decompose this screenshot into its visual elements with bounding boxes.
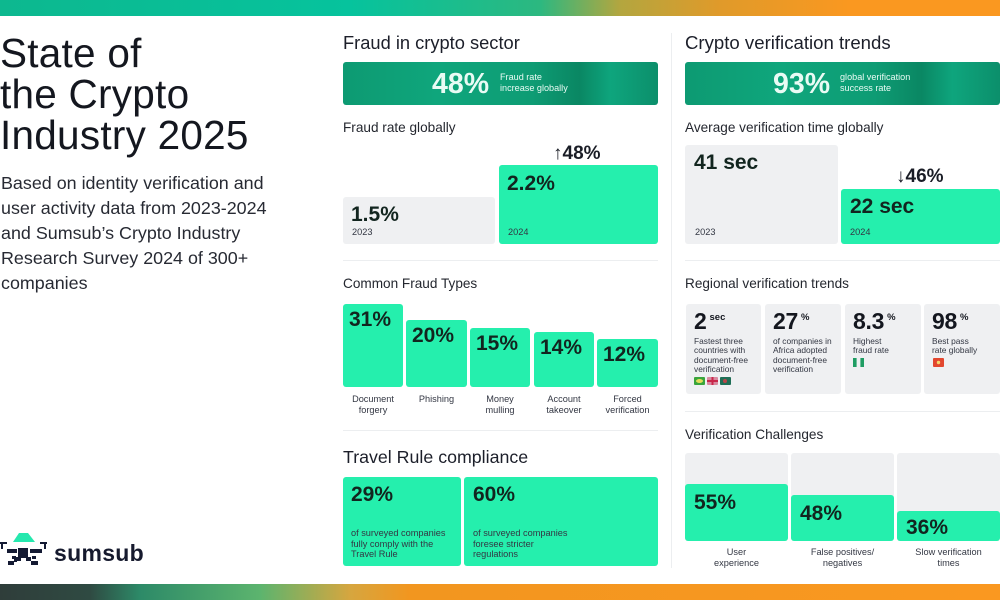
bar: money mulling: 15% [476, 332, 518, 355]
banner caption [840, 72, 910, 93]
card: 29% comply [343, 477, 461, 566]
bar: forced verification: 12% [603, 343, 645, 366]
card: 27%: verification [773, 364, 813, 374]
card: 2 sec: document-free [694, 355, 748, 365]
card: 98%: 98 % [932, 308, 968, 334]
icon: flag nigeria [853, 358, 864, 367]
bar chart: fraud types [343, 304, 658, 415]
bar: 36%: 36% [906, 516, 948, 539]
card: 2 sec: countries with [694, 345, 745, 355]
label: money mulling: mulling [485, 404, 515, 414]
icon: sumsub mascot [0, 533, 47, 565]
intro text: Based on identity verification and [1, 173, 264, 193]
heading: travel rule compliance: Travel Rule compliance [343, 447, 528, 467]
intro text: companies [1, 273, 88, 293]
card: 98%: Best pass [932, 336, 969, 346]
banner caption: success rate [840, 83, 891, 93]
bar: 22 sec: 2024 [850, 227, 870, 237]
bar: 2023 fraud rate [343, 197, 495, 244]
track [791, 453, 894, 541]
card: 8.3%: fraud rate [853, 345, 889, 355]
bar: document forgery: 31% [349, 308, 391, 331]
card: 29% comply: of surveyed companies [351, 528, 445, 538]
chart: user experience [685, 453, 788, 568]
label: money mulling: Money [486, 394, 514, 404]
heading: fraud rate globally: Fraud rate globally [343, 120, 456, 135]
bar: 41 sec: 2023 [695, 227, 715, 237]
title [0, 30, 249, 158]
chart: false positives [791, 453, 894, 568]
banner: 93% success [685, 62, 1000, 105]
intro text: user activity data from 2023-2024 [1, 198, 267, 218]
label: account takeover [546, 394, 582, 414]
card: 8.3% [845, 304, 921, 394]
intro text: Research Survey 2024 of 300+ [1, 248, 248, 268]
bar: document forgery [343, 304, 403, 387]
bar: forced verification [597, 339, 658, 387]
bottom gradient band [0, 584, 1000, 600]
bar: 41 sec [685, 145, 838, 244]
label: document forgery: Document [352, 394, 394, 404]
bar: 2024 fraud rate: 2024 [508, 227, 528, 237]
card: 27% [765, 304, 841, 394]
banner caption [500, 72, 568, 93]
label: experience [714, 558, 759, 568]
label: account takeover: Account [547, 394, 581, 404]
card: 2 sec: Fastest three [694, 336, 743, 346]
label [915, 547, 982, 568]
card: 98% [924, 304, 1000, 394]
banner value: 93% [773, 68, 830, 100]
title: the Crypto [0, 71, 189, 117]
title: Industry 2025 [0, 112, 249, 158]
top gradient band [0, 0, 1000, 16]
label: forced verification [606, 394, 649, 414]
banner value: 48% [432, 68, 489, 100]
card: 60% stricter: 60% [473, 483, 515, 506]
bar: 48% [791, 495, 894, 541]
card: 8.3%: Highest [853, 336, 881, 346]
label: Slow verification [915, 547, 982, 557]
vertical divider [671, 33, 672, 568]
chart: slow verification [897, 453, 1000, 568]
bar: 2024 fraud rate [499, 165, 658, 244]
bar: account takeover [534, 332, 594, 387]
card: 27%: of companies in [773, 336, 832, 346]
card: 27%: document-free [773, 355, 827, 365]
logo: sumsub [0, 533, 144, 566]
label: money mulling [485, 394, 515, 415]
bar: 2024 fraud rate: 2.2% [507, 172, 555, 195]
card: 29% comply: 29% [351, 483, 393, 506]
label: forced verification: Forced [613, 394, 642, 404]
bar: 55% [685, 484, 788, 541]
bar: 2023 fraud rate: 2023 [352, 227, 372, 237]
card: 98%: rate globally [932, 345, 977, 355]
label: times [938, 558, 959, 568]
track [897, 453, 1000, 541]
heading: verification challenges: Verification Challenges [685, 427, 823, 442]
heading: average verification time: Average verification time globally [685, 120, 883, 135]
title: State of [0, 30, 142, 76]
card: 29% comply: Travel Rule [351, 549, 398, 559]
bar: account takeover: 14% [540, 336, 582, 359]
bar: 2023 fraud rate: 1.5% [351, 203, 399, 226]
card: 60% stricter: regulations [473, 549, 518, 559]
card: 60% stricter [464, 477, 658, 566]
label: account takeover: takeover [546, 404, 582, 414]
track [685, 453, 788, 541]
label: negatives [823, 558, 862, 568]
bar: money mulling [470, 328, 530, 387]
label: document forgery [352, 394, 394, 415]
banner caption: increase globally [500, 83, 568, 93]
bar: 48%: 48% [800, 502, 842, 525]
card: 60% stricter: of surveyed companies [473, 528, 567, 538]
label [811, 547, 874, 568]
heading: regional verification trends: Regional verification trends [685, 276, 849, 291]
bar: phishing [406, 320, 467, 387]
bar: 22 sec: 22 sec [850, 195, 914, 218]
card: 27%: 27 % [773, 308, 809, 334]
heading: fraud in crypto sector: Fraud in crypto sector [343, 32, 520, 53]
card: 2 sec [686, 304, 761, 394]
change label: up 48%: ↑48% [553, 143, 601, 164]
change label: down 46%: ↓46% [896, 166, 944, 187]
label: phishing: Phishing [419, 394, 454, 404]
banner: 48% fraud rate [343, 62, 658, 105]
intro text [1, 173, 267, 293]
banner caption: global verification [840, 72, 910, 82]
intro text: and Sumsub’s Crypto Industry [1, 223, 240, 243]
label [714, 547, 759, 568]
banner caption: Fraud rate [500, 72, 542, 82]
label: forced verification: verification [606, 404, 649, 414]
card: 2 sec: 2 sec [694, 308, 725, 334]
label: User [727, 547, 746, 557]
card: 27%: Africa adopted [773, 345, 827, 355]
card: 2 sec: verification [694, 364, 734, 374]
card: 60% stricter: foresee stricter [473, 538, 534, 548]
card: 8.3%: 8.3 % [853, 308, 896, 334]
logo wordmark: sumsub [54, 540, 144, 566]
heading: crypto verification trends: Crypto verification trends [685, 32, 891, 53]
icon: flag vietnam [933, 358, 944, 367]
label: False positives/ [811, 547, 874, 557]
bar: 36% [897, 511, 1000, 541]
bar: phishing: 20% [412, 324, 454, 347]
bar: 41 sec: 41 sec [694, 151, 758, 174]
card: 29% comply: fully comply with the [351, 538, 433, 548]
bar: 55%: 55% [694, 491, 736, 514]
icon: flags brazil uk bangladesh [694, 377, 731, 385]
heading: common fraud types: Common Fraud Types [343, 276, 477, 291]
label: document forgery: forgery [359, 404, 387, 414]
bar: 22 sec [841, 189, 1000, 244]
